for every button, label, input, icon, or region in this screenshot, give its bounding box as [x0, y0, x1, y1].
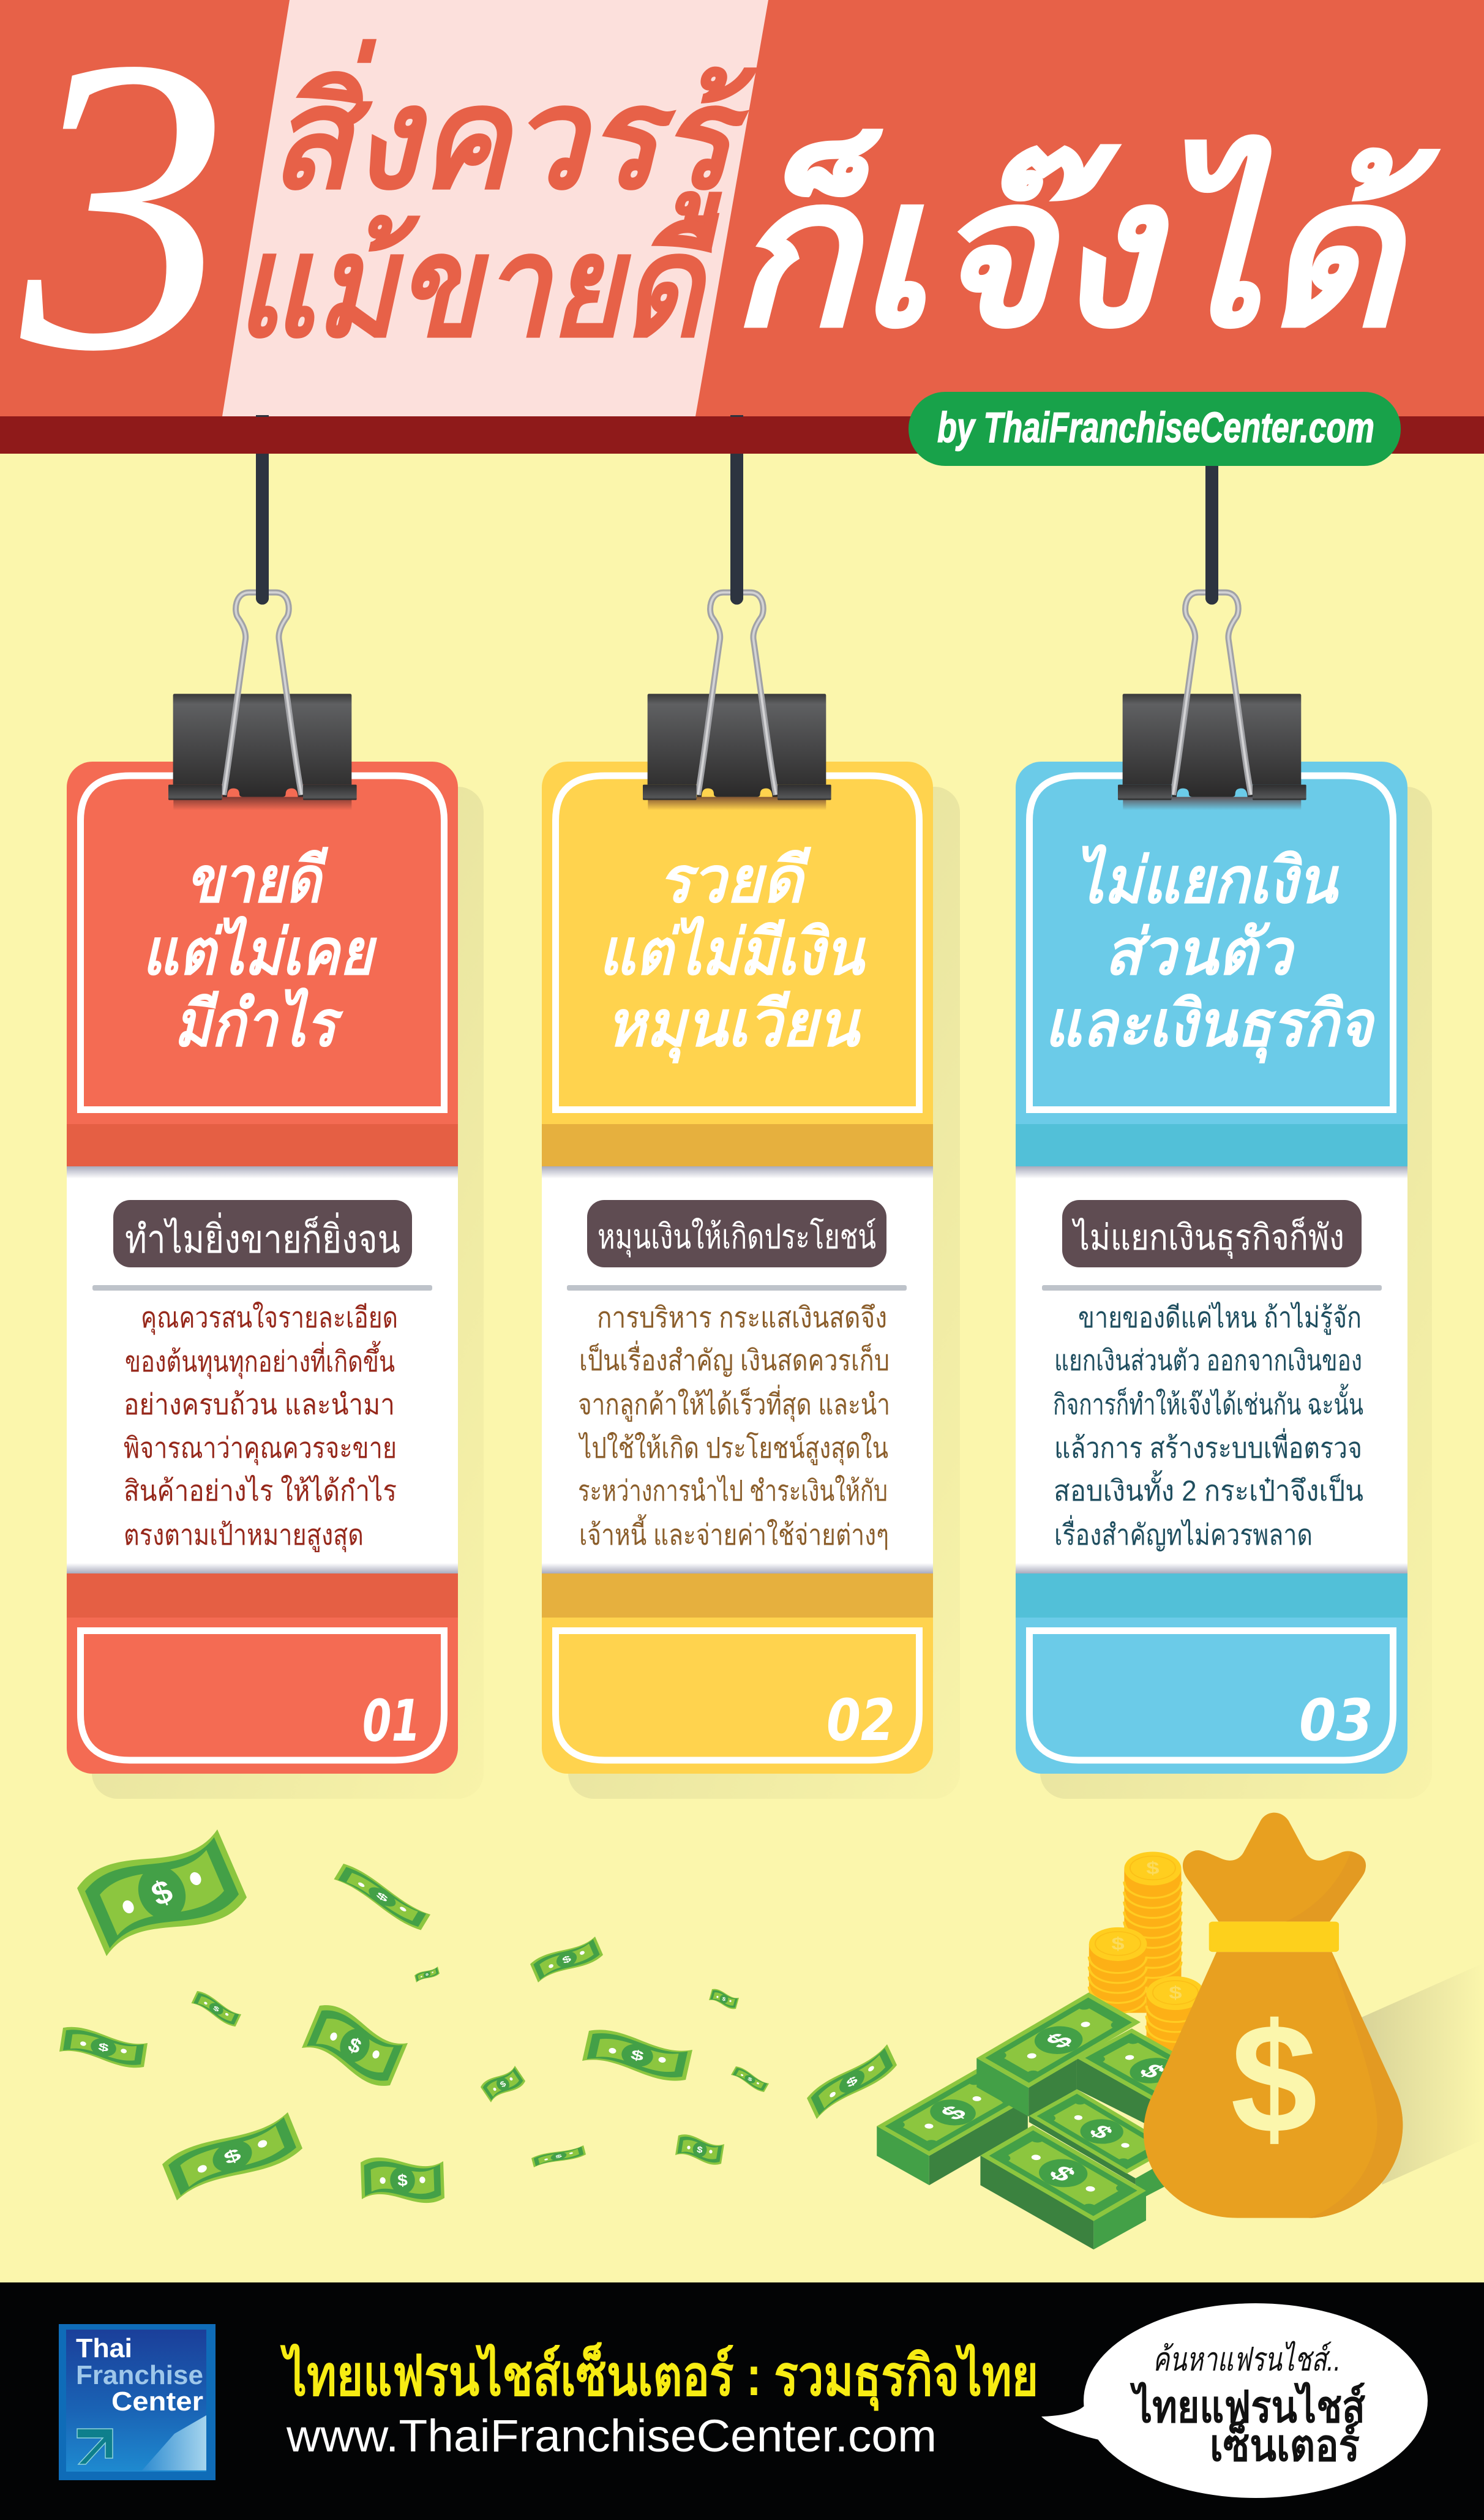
coin stack middle	[1089, 1927, 1147, 2013]
coin stack middle: $	[1111, 1934, 1125, 1954]
band top	[1016, 1124, 1407, 1166]
banknote: $	[375, 1890, 390, 1904]
footer url: www.ThaiFranchiseCenter.com	[286, 2410, 937, 2461]
subheading pill card 1	[113, 1200, 412, 1267]
banknote	[479, 2064, 527, 2104]
footer tagline: ไทยแฟรนไชส์เซ็นเตอร์ : รวมธุรกิจไทย	[280, 2342, 1038, 2411]
body text card 3: แล้วการ สร้างระบบเพื่อตรวจ	[1054, 1428, 1362, 1464]
banknote	[333, 1862, 432, 1932]
icon: binder clip 2	[643, 593, 831, 810]
heading card 2: รวยดี	[658, 845, 812, 916]
body text card 2	[578, 1301, 890, 1551]
band bottom	[67, 1573, 458, 1618]
coin stack front	[1147, 1976, 1204, 2057]
banknote: $	[146, 1873, 178, 1913]
body text card 1: ของต้นทุนทุกอย่างที่เกิดขึ้น	[125, 1341, 395, 1379]
logo: Franchise	[76, 2360, 203, 2390]
heading card 1: ขายดี	[186, 845, 329, 916]
body text card 1: อย่างครบถ้วน และนำมา	[124, 1388, 395, 1420]
panel: card 3	[1016, 762, 1432, 1799]
heading card 1	[142, 845, 377, 1060]
white sheet	[1016, 1166, 1407, 1573]
title big: ก็เจ๊งได้	[729, 126, 1442, 369]
band top	[67, 1124, 458, 1166]
cash stack C: $	[1132, 2060, 1172, 2082]
banknote	[708, 1988, 740, 2010]
bag shadow	[1361, 1963, 1484, 2184]
panel: card 1	[67, 762, 484, 1799]
body text card 3: กิจการก็ทำให้เจ๊งได้เช่นกัน ฉะนั้น	[1053, 1384, 1363, 1420]
banknote	[582, 2027, 693, 2083]
speech bubble	[1041, 2303, 1428, 2498]
body text card 1: สินค้าอย่างไร ให้ได้กำไร	[124, 1474, 397, 1507]
banknote: $	[345, 2033, 364, 2058]
white sheet	[67, 1166, 458, 1573]
cash stack B: $	[1039, 2029, 1080, 2052]
cash stack D	[1029, 2090, 1175, 2202]
card frame top	[81, 776, 444, 1109]
banknote: $	[498, 2079, 508, 2089]
subheading pill card 2: หมุนเงินให้เกิดประโยชน์	[598, 1217, 876, 1258]
banknote: $	[561, 1953, 573, 1966]
cash stack A: $	[934, 2102, 973, 2124]
heading card 1: แต่ไม่เคย	[142, 915, 377, 988]
cash stack B	[976, 1992, 1141, 2117]
card body	[542, 762, 933, 1774]
body text card 2: จากลูกค้าให้ได้เร็วที่สุด และนำ	[578, 1384, 890, 1422]
cash stack E	[980, 2125, 1146, 2249]
cash stack A	[877, 2069, 1029, 2185]
banknote	[160, 2107, 304, 2205]
heading card 2: หมุนเวียน	[606, 989, 861, 1063]
body text card 1: พิจารณาว่าคุณควรจะขาย	[124, 1431, 397, 1466]
heading card 1: มีกำไร	[174, 987, 344, 1060]
bag dollar sign: $	[1231, 1992, 1317, 2166]
speech bubble: เซ็นเตอร์	[1210, 2419, 1360, 2470]
banknote: $	[722, 1996, 726, 2002]
body text card 2: ระหว่างการนำไป ชำระเงินให้กับ	[578, 1474, 888, 1507]
banknote	[730, 2065, 770, 2093]
band top	[542, 1124, 933, 1166]
white sheet	[542, 1166, 933, 1573]
cash stack E: $	[1041, 2162, 1083, 2186]
byline pill	[909, 392, 1401, 466]
subheading pill card 3: ไม่แยกเงินธุรกิจก็พัง	[1071, 1217, 1344, 1259]
subheading pill card 1: ทำไมยิ่งขายก็ยิ่งจน	[125, 1212, 400, 1261]
subheading pill card 3	[1062, 1200, 1362, 1267]
banknote: $	[747, 2076, 753, 2083]
card frame bottom	[81, 1631, 444, 1760]
card shadow	[92, 787, 484, 1799]
number 01: 01	[362, 1688, 421, 1755]
icon: binder clip 1	[168, 593, 357, 810]
banknote: $	[555, 2153, 563, 2159]
body text card 3: เรื่องสำคัญทไม่ควรพลาด	[1054, 1515, 1313, 1551]
card frame top	[556, 776, 920, 1109]
band bottom	[542, 1573, 933, 1618]
banknote	[806, 2042, 898, 2121]
number 02: 02	[826, 1687, 895, 1754]
banknote: $	[696, 2145, 703, 2155]
body text card 2: การบริหาร กระแสเงินสดจึง	[597, 1301, 887, 1333]
subheading pill card 2	[587, 1200, 886, 1267]
dark red rail	[0, 416, 1484, 454]
hanging strings	[256, 454, 1218, 605]
logo: Thai	[76, 2333, 132, 2363]
speech bubble: ค้นหาแฟรนไชส์..	[1153, 2341, 1341, 2378]
card shadow	[1040, 787, 1432, 1799]
body text card 3: ขายของดีแค่ไหน ถ้าไม่รู้จัก	[1078, 1301, 1362, 1335]
logo	[59, 2324, 215, 2480]
body text card 3	[1053, 1301, 1363, 1551]
banknote: $	[97, 2041, 110, 2055]
card frame top	[1030, 776, 1393, 1109]
banknote: $	[425, 1972, 429, 1977]
banknote	[675, 2133, 725, 2166]
body text card 2: ไปใช้ให้เกิด ประโยชน์สูงสุดใน	[578, 1431, 888, 1466]
body text card 1: ตรงตามเป้าหมายสูงสุด	[124, 1518, 364, 1553]
string tips over clips	[256, 588, 1218, 605]
banknote	[299, 2000, 410, 2091]
body text card 2: เจ้าหนี้ และจ่ายค่าใช้จ่ายต่างๆ	[579, 1514, 889, 1551]
banknote	[361, 2156, 444, 2204]
banknote: $	[397, 2171, 408, 2189]
banknote	[414, 1966, 440, 1983]
cash stack C	[1077, 2028, 1229, 2130]
body text card 1	[124, 1301, 398, 1553]
banknote	[73, 1821, 250, 1965]
number 03: 03	[1299, 1687, 1373, 1754]
card shadow	[568, 787, 960, 1799]
panel: card 2	[542, 762, 960, 1799]
speech bubble: ไทยแฟรนไชส์	[1130, 2381, 1365, 2432]
logo: Center	[111, 2387, 203, 2417]
coin stack front: $	[1169, 1983, 1182, 2003]
body text card 3: สอบเงินทั้ง 2 กระเป๋าจึงเป็น	[1054, 1470, 1363, 1507]
heading card 3: ส่วนตัว	[1104, 917, 1295, 988]
heading card 3	[1044, 844, 1376, 1063]
icon: binder clip 3	[1118, 593, 1306, 810]
card body	[1016, 762, 1407, 1774]
heading card 3: และเงินธุรกิจ	[1044, 989, 1376, 1063]
illustration: money pile, coins and bag	[877, 1813, 1484, 2249]
banknote	[59, 2025, 148, 2070]
banknote: $	[844, 2073, 859, 2090]
heading card 2: แต่ไม่มีเงิน	[599, 915, 866, 988]
card frame bottom	[556, 1631, 920, 1760]
title line 1: สิ่งควรรู้	[269, 39, 759, 227]
pale slanted strip	[222, 0, 768, 416]
banknote	[529, 1934, 604, 1985]
body text card 2: เป็นเรื่องสำคัญ เงินสดควรเก็บ	[579, 1340, 890, 1377]
header banner	[0, 0, 1484, 466]
heading card 2	[599, 845, 866, 1063]
coin stack tall	[1124, 1851, 1182, 1991]
heading card 3: ไม่แยกเงิน	[1074, 844, 1340, 917]
card frame bottom	[1030, 1631, 1393, 1760]
band bottom	[1016, 1573, 1407, 1618]
cash stack D: $	[1083, 2121, 1120, 2142]
title line 2: แม้ขายดี	[236, 208, 720, 366]
money bag	[1144, 1813, 1403, 2218]
banknote: $	[212, 2004, 220, 2014]
card body	[67, 762, 458, 1774]
body text card 1: คุณควรสนใจรายละเอียด	[141, 1301, 398, 1335]
banknote: $	[221, 2145, 244, 2169]
banknote	[190, 1989, 242, 2028]
coin stack tall: $	[1146, 1859, 1160, 1878]
footer	[0, 2282, 1484, 2520]
banknote: $	[629, 2047, 645, 2064]
flying banknotes	[59, 1821, 898, 2205]
body text card 3: แยกเงินส่วนตัว ออกจากเงินของ	[1054, 1344, 1362, 1376]
banknote	[531, 2144, 586, 2169]
